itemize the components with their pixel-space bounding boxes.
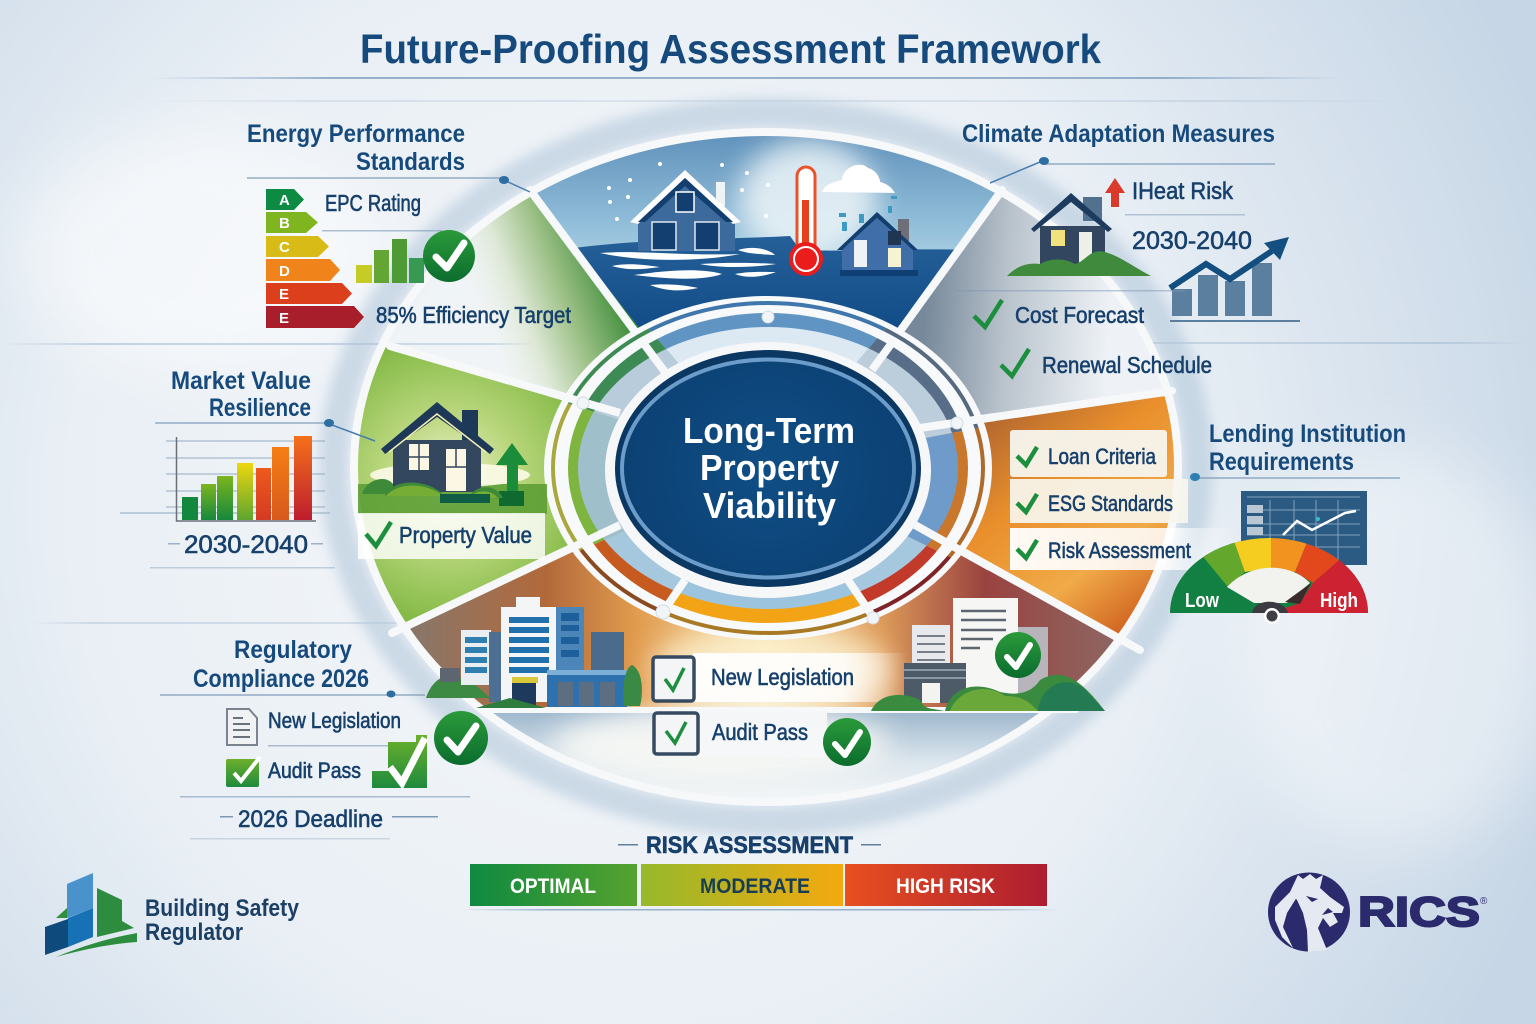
panel: regulatory compliance 2026 [160, 636, 488, 840]
heading [171, 367, 311, 422]
central hub: Viability [703, 485, 836, 526]
leader [990, 157, 1275, 183]
icon: thermometer [789, 167, 823, 276]
icon: house with arrow [358, 402, 547, 514]
logo: Building Safety Regulator: Regulator [145, 919, 243, 946]
heading: Climate Adaptation Measures [962, 120, 1275, 148]
EPC rating arrows: E [279, 286, 289, 303]
bar: optimal [470, 864, 637, 906]
wedge: lending [966, 396, 1174, 634]
callout: audit pass: Audit Pass [712, 719, 808, 745]
EPC rating arrows [266, 189, 364, 328]
leader [160, 690, 425, 698]
callout: property value [358, 513, 545, 559]
callout: new legislation: New Legislation [711, 664, 854, 690]
leader [1190, 473, 1400, 481]
text: EPC Rating: EPC Rating [325, 190, 421, 216]
callout: audit pass [654, 710, 827, 757]
checklist: cost forecast [955, 290, 1185, 328]
icon: small green check [226, 757, 260, 787]
icon: red up arrow [1105, 178, 1125, 207]
text: heat risk: IHeat Risk [1132, 178, 1234, 205]
checklist: cost forecast: Cost Forecast [1015, 302, 1145, 328]
checklist: risk assessment: Risk Assessment [1048, 538, 1191, 563]
icon: checkbox [654, 713, 698, 754]
icon: large green check [372, 735, 427, 788]
gauge: High [1320, 590, 1358, 612]
text: new legislation: New Legislation [268, 708, 401, 733]
bar chart [120, 436, 330, 521]
callout: new legislation [653, 653, 907, 702]
heading: RISK ASSESSMENT [646, 832, 853, 859]
wedge: regulatory compliance [410, 552, 1114, 776]
icon: check circle [823, 718, 871, 766]
central circular wheel [280, 100, 1300, 900]
bar: moderate: MODERATE [700, 875, 810, 898]
illustration: city buildings [426, 597, 642, 708]
icon: check circle [434, 711, 488, 765]
central hub [615, 350, 921, 587]
heading: Resilience [209, 394, 311, 422]
icon: check circle [423, 230, 475, 282]
bar: moderate [641, 864, 843, 906]
leader [155, 419, 375, 441]
callout: property value: Property Value [399, 522, 532, 548]
checklist: ESG standards [1010, 479, 1188, 523]
icon: check circle [995, 632, 1041, 678]
heading [193, 636, 369, 693]
heading: Standards [356, 148, 465, 176]
checklist: loan criteria: Loan Criteria [1048, 444, 1157, 469]
bar: high risk: HIGH RISK [896, 875, 995, 898]
logo: RICS: ® [1480, 896, 1488, 907]
text: audit pass: Audit Pass [268, 758, 361, 783]
risk assessment scale [460, 832, 1060, 910]
checklist: renewal schedule: Renewal Schedule [1042, 352, 1212, 378]
text: efficiency target: 85% Efficiency Target [376, 302, 572, 328]
logo: Building Safety Regulator [45, 873, 300, 957]
central hub: Property [700, 447, 839, 488]
bar: high risk [845, 864, 1047, 906]
icon: chart board [1241, 491, 1367, 565]
gauge [1170, 538, 1368, 624]
checklist: risk assessment [1010, 528, 1236, 570]
heading: Lending Institution [1209, 420, 1406, 448]
heading [247, 120, 465, 176]
icon: flooded house [600, 162, 776, 290]
panel: climate adaptation measures [955, 120, 1300, 378]
panel: lending institution requirements [1010, 420, 1406, 624]
logo: Building Safety Regulator: Building Safety [145, 895, 300, 922]
wedge: energy performance [396, 197, 639, 393]
illustration: offices with document [871, 598, 1105, 711]
icon: cloud and second house [822, 165, 918, 276]
heading [1209, 420, 1406, 476]
text: years [1125, 214, 1252, 255]
text: years: 2030-2040 [184, 531, 308, 559]
wheel rim and dividers [354, 132, 1178, 802]
wedge: market value [358, 346, 568, 622]
EPC rating arrows: B [279, 215, 290, 232]
wedge: climate adaptation [904, 197, 1144, 415]
central hub: Long-Term [683, 410, 855, 451]
checklist: renewal schedule [1001, 349, 1212, 378]
checklist: ESG standards: ESG Standards [1048, 491, 1173, 516]
icon: house with bushes [1007, 193, 1151, 276]
text: years: 2030-2040 [1132, 227, 1252, 255]
EPC rating arrows: A [279, 192, 290, 209]
panel: energy performance standards [247, 120, 572, 328]
heading: Market Value [171, 367, 311, 395]
EPC rating arrows: D [279, 263, 290, 280]
heading: Energy Performance [247, 120, 465, 148]
heading: Compliance 2026 [193, 665, 369, 693]
gauge: Low [1185, 590, 1219, 612]
logo: RICS [1268, 872, 1488, 952]
EPC rating arrows: C [279, 239, 290, 256]
bar chart [322, 230, 442, 283]
checklist: loan criteria [1010, 430, 1167, 477]
title: Future-Proofing Assessment Framework [360, 26, 1101, 72]
icon: rising chart [1170, 237, 1300, 322]
wedge: climate and flood scene backdrop [537, 136, 995, 328]
EPC rating arrows: E [279, 310, 289, 327]
leader [247, 176, 530, 192]
icon: document [227, 709, 257, 745]
logo: RICS: RICS [1358, 888, 1480, 935]
inner rings [544, 296, 996, 640]
panel: market value resilience [120, 367, 547, 568]
heading: Requirements [1209, 448, 1354, 476]
heading: Regulatory [234, 636, 352, 664]
text: 2026 deadline: 2026 Deadline [238, 806, 383, 833]
text: new legislation [268, 708, 401, 746]
icon: clipboard check [653, 657, 694, 701]
bar: optimal: OPTIMAL [510, 875, 596, 898]
